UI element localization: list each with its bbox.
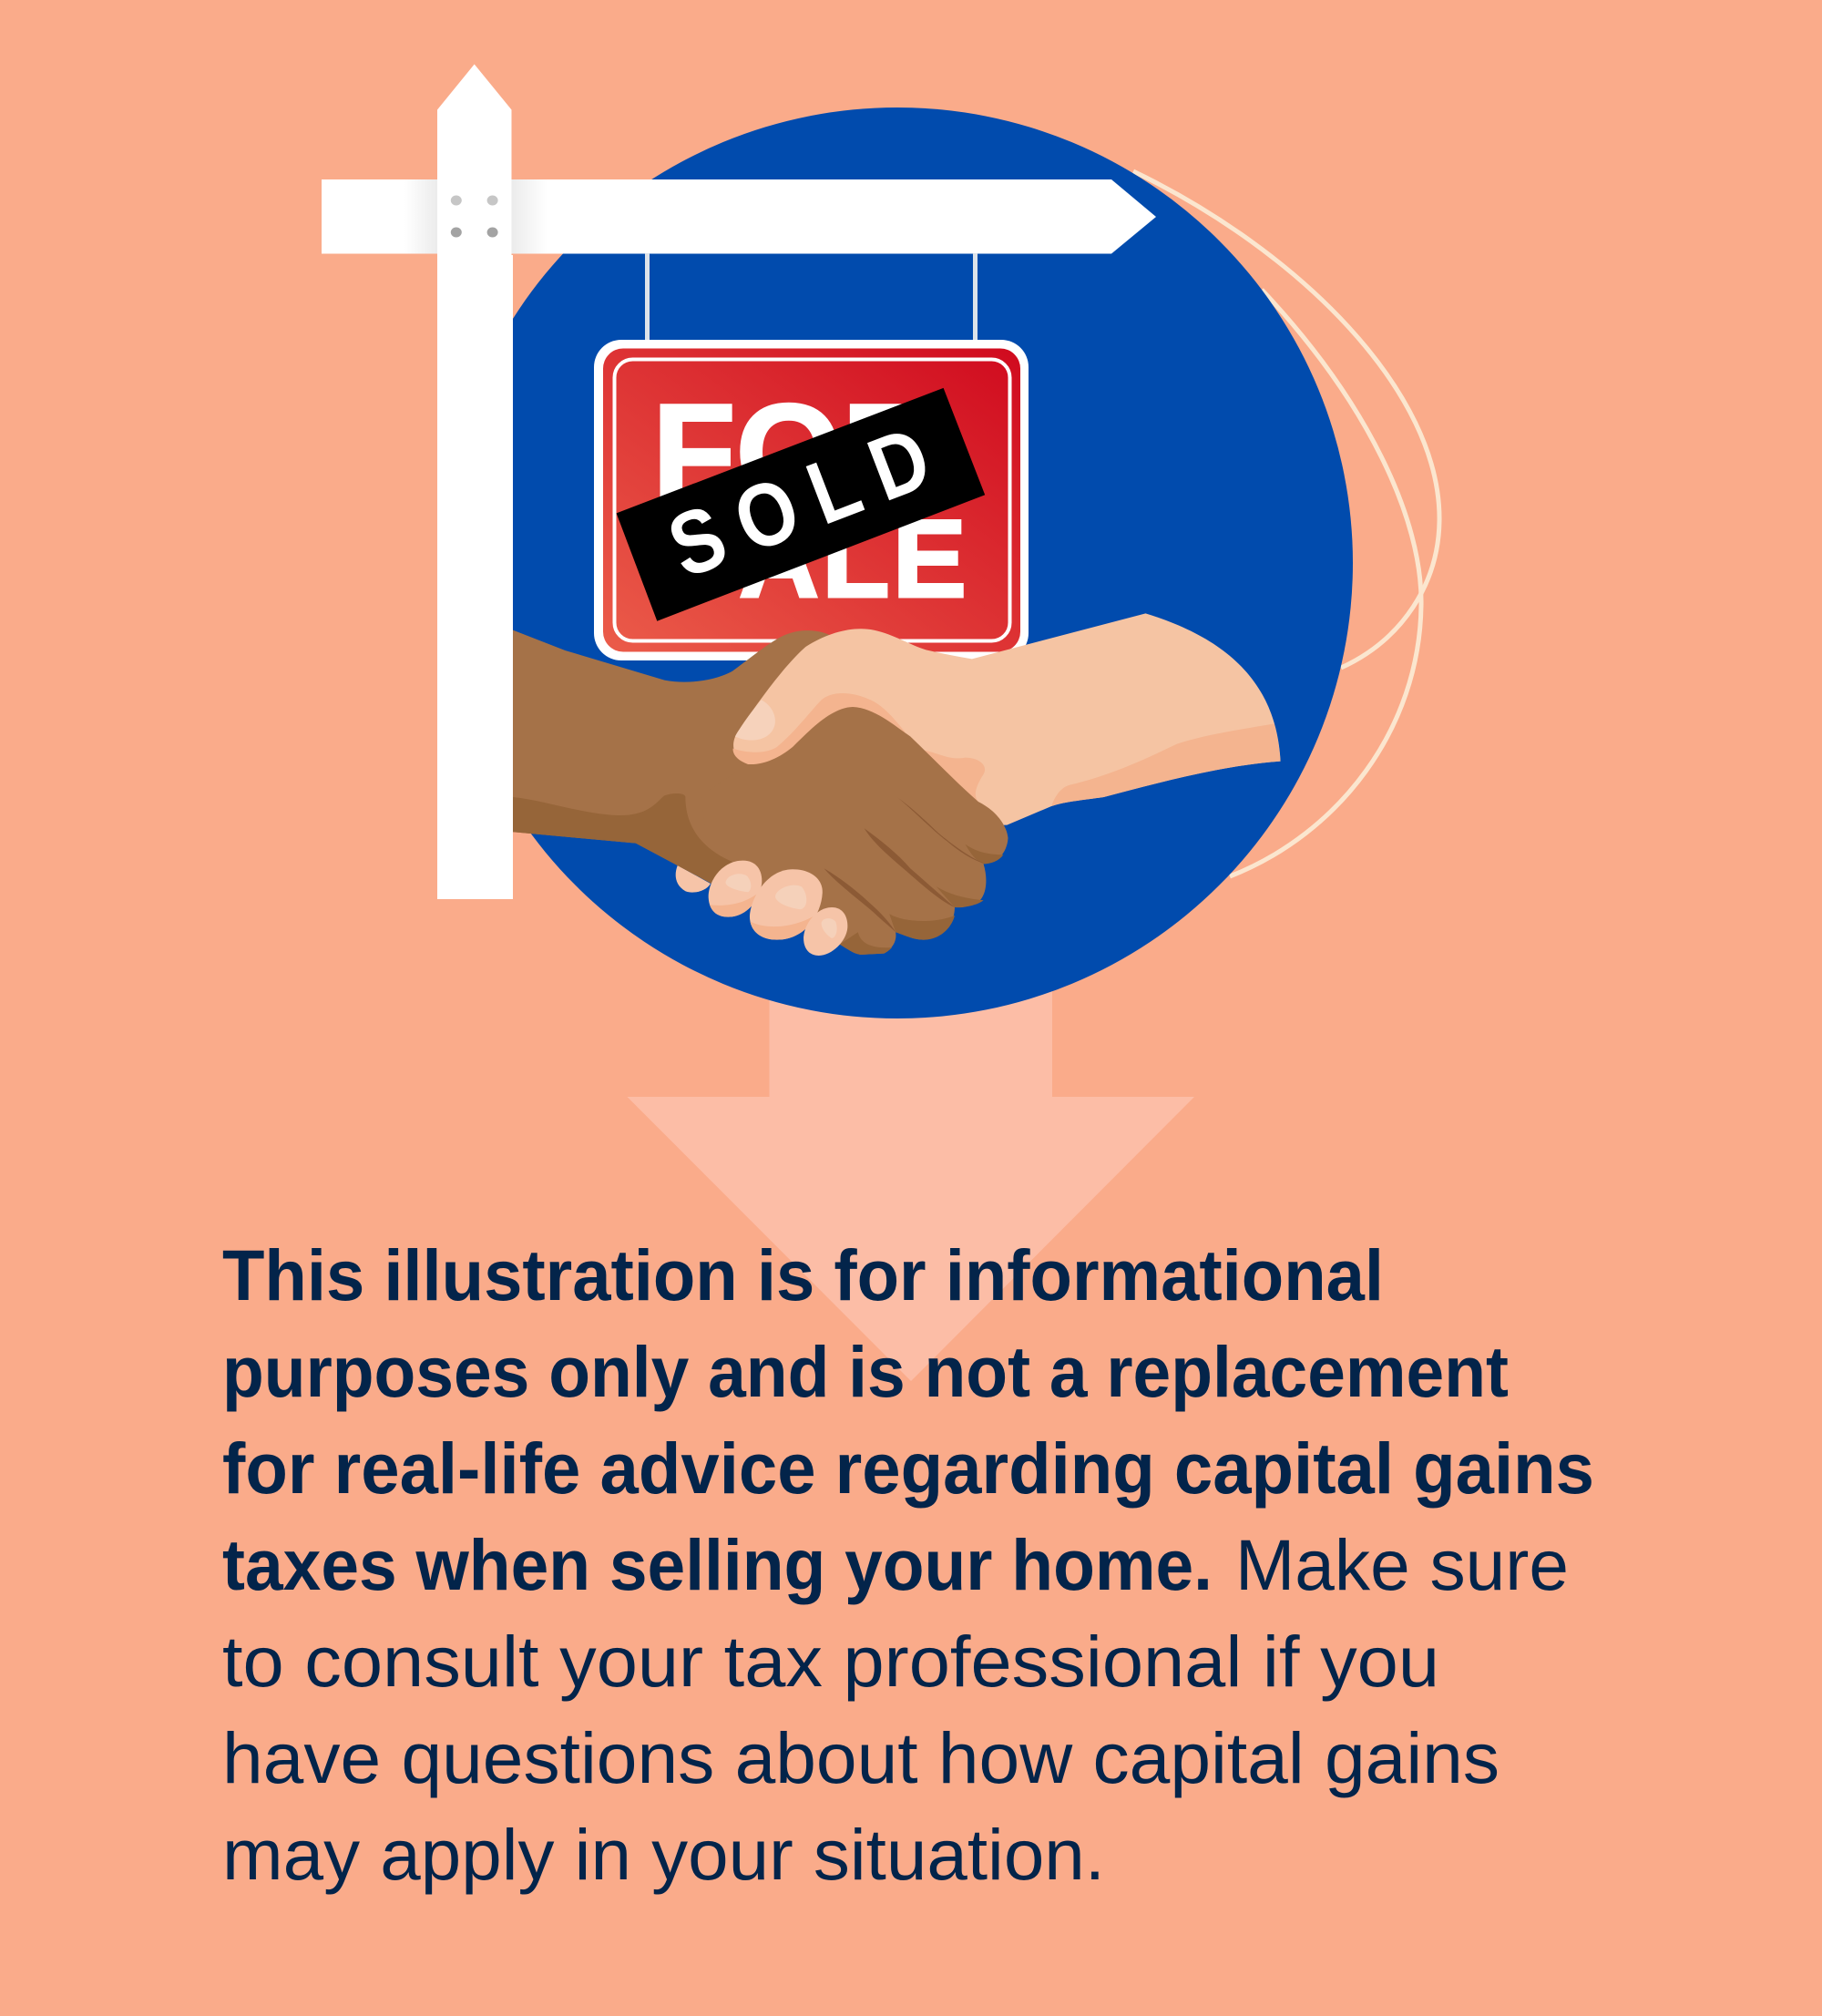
finger shading (840, 844, 1003, 955)
for text: FOR (652, 375, 941, 528)
sign hangers (645, 253, 978, 341)
for sale sign (594, 340, 1029, 660)
thumb shadow (733, 693, 905, 765)
brown hand (701, 707, 1008, 955)
disclaimer text: purposes only and is not a replacement (222, 1331, 1509, 1412)
finger creases (824, 797, 984, 932)
disclaimer text: have questions about how capital gains (222, 1717, 1500, 1798)
blue circle (442, 107, 1353, 1018)
arrow pointing down (627, 984, 1194, 1381)
thumb highlight (735, 700, 775, 740)
orbit lines (1133, 171, 1439, 876)
handshake (513, 613, 1281, 956)
disclaimer text: taxes when selling your home. (222, 1524, 1213, 1605)
sale text: SALE (662, 496, 969, 620)
disclaimer text: Make sure (1235, 1524, 1569, 1605)
light arm and hand (733, 613, 1281, 826)
arm shadow (1051, 723, 1281, 806)
disclaimer text: for real-life advice regarding capital gains (222, 1428, 1594, 1509)
sold text: SOLD (656, 401, 961, 597)
skin finger one (709, 860, 762, 917)
skin finger three (804, 907, 847, 956)
brown arm (513, 630, 858, 884)
disclaimer text: This illustration is for informational (222, 1234, 1384, 1315)
skin finger two (749, 869, 823, 940)
skin little finger (676, 865, 711, 893)
crossbar of sign post (322, 179, 1156, 253)
wrist shadow (924, 750, 985, 802)
sign post (437, 64, 513, 899)
disclaimer text: may apply in your situation. (222, 1814, 1105, 1895)
disclaimer text: to consult your tax professional if you (222, 1621, 1439, 1702)
disclaimer text (222, 1234, 1594, 1895)
dark lower arm (513, 793, 738, 884)
post bolts (451, 195, 498, 237)
sold banner (617, 388, 985, 621)
